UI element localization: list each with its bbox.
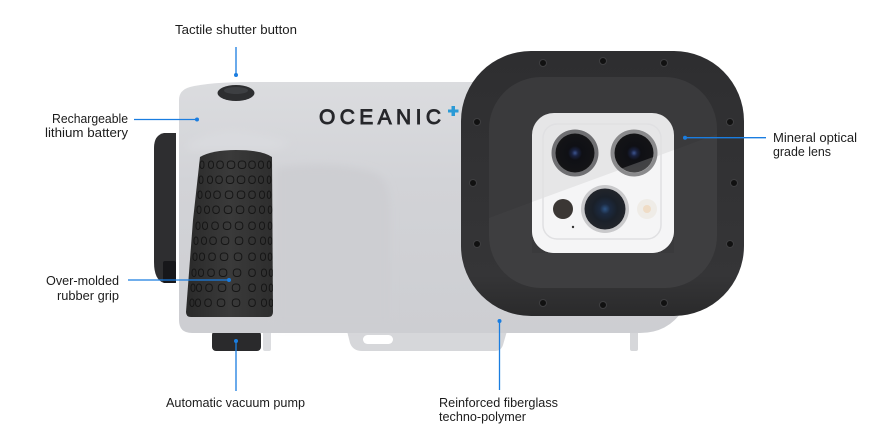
callout: mineral optical grade lens [683,131,857,159]
lens bezel [461,51,744,316]
lidar sensor [553,199,573,219]
callout: reinforced fiberglass techno-polymer: Reinforced fiberglass [439,396,558,410]
callout: automatic vacuum pump [166,339,305,410]
callout: reinforced fiberglass techno-polymer [439,319,558,424]
callout: rechargeable lithium battery [45,112,199,140]
feet and mounting bracket [263,330,638,351]
callout: mineral optical grade lens: Mineral optical [773,131,857,145]
callout: mineral optical grade lens: grade lens [773,145,831,159]
screws [470,58,738,308]
inner window [489,77,717,288]
callout: rechargeable lithium battery: lithium battery [45,126,129,140]
microphone [572,226,574,228]
shutter button [218,85,254,101]
callout: tactile shutter button: Tactile shutter button [175,23,297,37]
grip recess [276,165,390,326]
callout: over-molded rubber grip: rubber grip [57,289,119,303]
glass glare [489,134,717,288]
callout: rechargeable lithium battery: Rechargeable [52,112,128,126]
rear lens housing [154,133,176,283]
shoulder highlight [186,130,290,150]
plate glare [532,150,674,253]
lens: top left [552,130,598,176]
lens: bottom [581,185,629,233]
slot [363,335,393,344]
callout: over-molded rubber grip [46,274,231,303]
callout: reinforced fiberglass techno-polymer: techno-polymer [439,410,526,424]
callout: tactile shutter button [175,23,297,77]
flash [637,199,657,219]
callout: over-molded rubber grip: Over-molded [46,274,119,288]
lens: top right [610,130,658,180]
rubber grip [186,150,273,317]
camera plate [532,113,674,253]
housing body [179,82,683,344]
grip texture [190,161,273,306]
vacuum pump knob [212,331,261,351]
plus mark [448,106,458,116]
callout: automatic vacuum pump: Automatic vacuum pump [166,396,305,410]
brand logo: OCEANIC [319,106,441,129]
